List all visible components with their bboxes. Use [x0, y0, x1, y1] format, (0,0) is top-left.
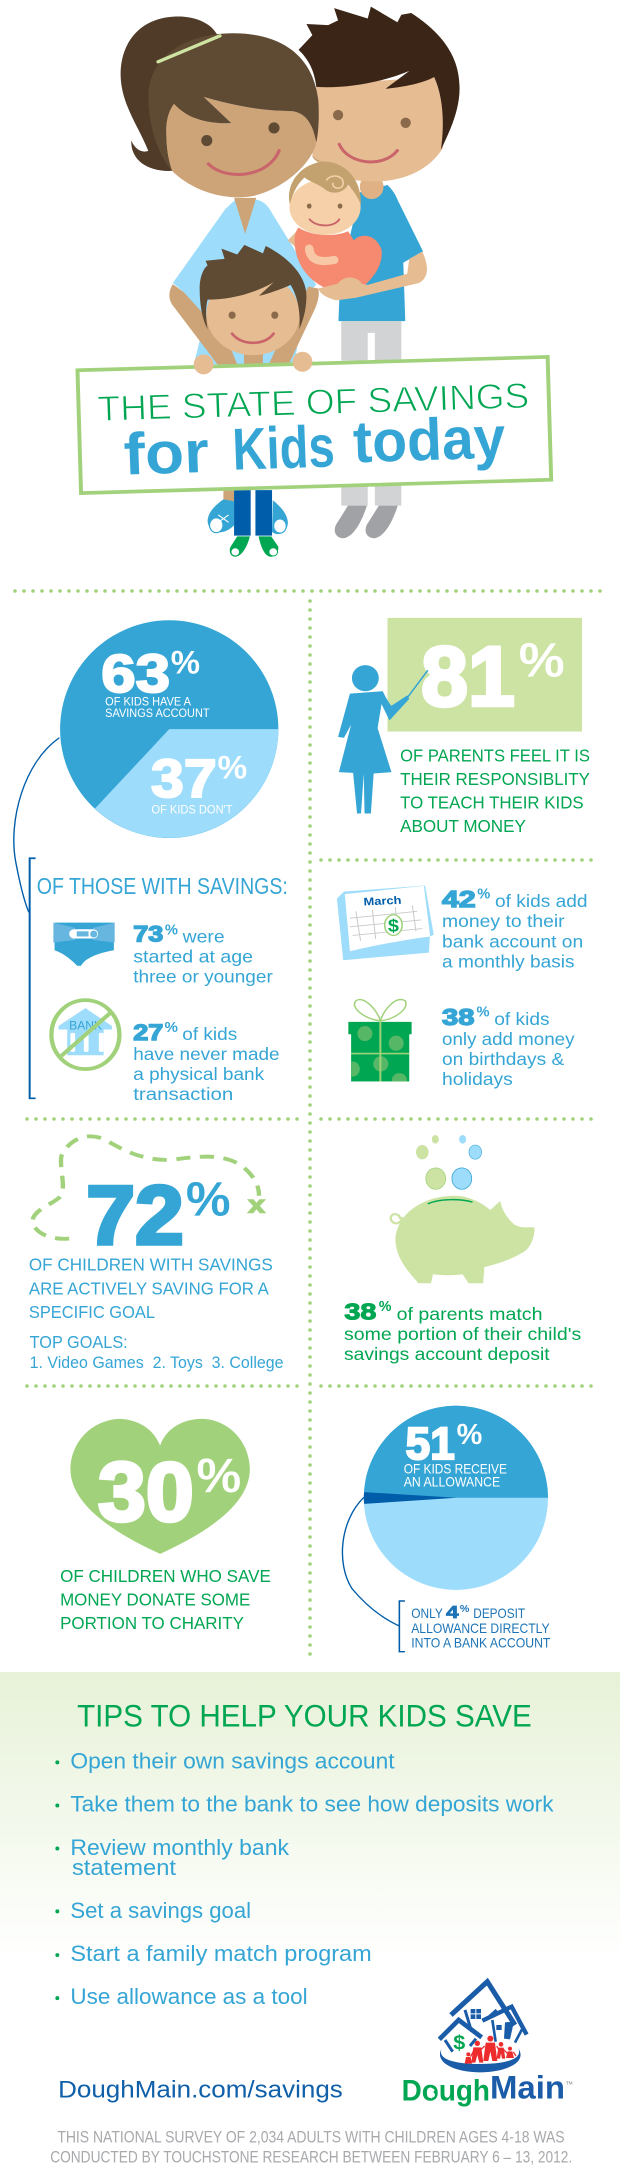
list: tips: Use allowance as a tool: [70, 1985, 308, 2009]
stat: 72 percent saving for goal: %: [186, 1172, 231, 1226]
icon: march calendar: March: [363, 894, 402, 908]
stat: 38 percent of parents match: [344, 1299, 581, 1364]
stat: 42 percent add monthly: a monthly basis: [442, 952, 575, 971]
list: tips: Review monthly bank: [70, 1836, 290, 1861]
list: tips: Start a family match program: [70, 1942, 372, 1966]
connector: allowance pie to callout: [342, 1497, 399, 1626]
icon: dashed treasure path: x: [248, 1192, 265, 1218]
list: tips: Open their own savings account: [70, 1749, 395, 1774]
stat: 73 percent started young: [133, 923, 273, 986]
logo: doughmain: $: [453, 2031, 466, 2054]
stat: 38 percent of parents match: savings account deposit: [344, 1344, 550, 1364]
callout: 4 percent deposit allowance: INTO A BANK ACCOUNT: [411, 1636, 551, 1651]
pie chart: 63 percent have savings: 37: [151, 750, 217, 809]
stat: 27 percent never made bank transaction: have never made: [133, 1044, 280, 1064]
stat: 42 percent add monthly: %: [477, 886, 490, 902]
icon: houses: [439, 1982, 527, 2052]
icon: teacher silhouette: [338, 665, 428, 814]
illustration: boy: [200, 245, 306, 557]
icon: gift box: [346, 1000, 412, 1087]
callout: 4 percent deposit allowance: ALLOWANCE DIRECTLY: [411, 1621, 550, 1637]
stat: 42 percent add monthly: bank account on: [442, 932, 583, 951]
callout: 4 percent deposit allowance: DEPOSIT: [473, 1607, 525, 1622]
stat: 27 percent never made bank transaction: a physical bank: [133, 1064, 265, 1084]
title sign: [77, 357, 551, 493]
heading: for kids today: today: [352, 404, 506, 475]
icon: march calendar: [337, 885, 434, 960]
callout: 4 percent deposit allowance: [399, 1601, 551, 1652]
stat: 38 percent birthdays and holidays: on birthdays &: [442, 1049, 565, 1069]
panel: tips background: [0, 1672, 620, 2171]
list: tips: statement: [72, 1856, 176, 1880]
stat: 72 percent saving for goal: 72: [86, 1168, 184, 1262]
stat: 73 percent started young: three or younger: [133, 966, 273, 986]
stat: 38 percent of parents match: some portion of their child's: [344, 1324, 581, 1344]
stat: 38 percent of parents match: of parents match: [397, 1304, 542, 1324]
stat: 73 percent started young: %: [165, 923, 178, 938]
heading: for kids today: for: [123, 419, 210, 487]
logo: doughmain: Dough: [402, 2075, 490, 2108]
bracket: of those with savings: [30, 858, 36, 1098]
callout: 4 percent deposit allowance: 4: [446, 1603, 459, 1622]
pie chart: 63 percent have savings: %: [217, 750, 247, 786]
logo: doughmain: Main: [490, 2069, 565, 2105]
panel: 81 percent of parents: 81: [421, 630, 515, 724]
icon: no bank: BANK: [69, 1018, 102, 1032]
stat: 42 percent add monthly: money to their: [442, 911, 565, 931]
icon: heart with 30 percent: %: [197, 1448, 241, 1503]
stat: 27 percent never made bank transaction: %: [164, 1020, 178, 1036]
stat: 38 percent birthdays and holidays: of kids: [494, 1009, 550, 1029]
stat: 38 percent of parents match: %: [379, 1299, 391, 1315]
list: tips: Take them to the bank to see how deposits work: [70, 1792, 554, 1817]
hero: family holding title sign: [77, 7, 551, 557]
pie chart: 51 percent receive allowance: %: [457, 1419, 482, 1451]
stat: 73 percent started young: were: [182, 927, 225, 946]
stat: 72 percent saving for goal: OF CHILDREN WITH SAVINGS: [29, 1255, 273, 1274]
stat: 72 percent saving for goal: SPECIFIC GOAL: [29, 1302, 155, 1322]
pie chart: 51 percent receive allowance: 51: [406, 1418, 455, 1469]
panel: goals, match, charity, allowance: [29, 1135, 581, 1652]
panel: 81 percent of parents: ABOUT MONEY: [400, 817, 526, 837]
pie chart: 63 percent have savings: %: [171, 645, 200, 681]
illustration: baby: [288, 155, 427, 300]
stat: 38 percent birthdays and holidays: %: [476, 1004, 490, 1020]
text: children donate to charity: [60, 1566, 271, 1633]
pie chart: 63 percent have savings: OF KIDS HAVE A: [105, 695, 191, 708]
panel: 81 percent of parents: %: [519, 633, 565, 687]
stat: 38 percent birthdays and holidays: only add money: [442, 1029, 575, 1049]
heading: for kids today: Kids: [231, 413, 336, 482]
callout: 4 percent deposit allowance: %: [460, 1604, 470, 1615]
list: top goals: TOP GOALS:: [30, 1333, 128, 1352]
stat: 27 percent never made bank transaction: [133, 1020, 280, 1104]
icon: hands gripping sign: [194, 352, 312, 374]
stat: 38 percent birthdays and holidays: holidays: [442, 1069, 513, 1089]
icon: no bank: [51, 1000, 119, 1069]
stat: 42 percent add monthly: [442, 886, 588, 971]
heading: of those with savings: OF THOSE WITH SAVINGS:: [37, 875, 288, 900]
heading: for kids today: [123, 404, 506, 487]
text: children donate to charity: PORTION TO CHARITY: [60, 1613, 244, 1633]
panel: 81 percent of parents: [338, 618, 590, 837]
icon: piggy bank: [391, 1196, 535, 1283]
panel: 81 percent of parents: TO TEACH THEIR KIDS: [400, 793, 584, 813]
pie chart: 63 percent have savings: [60, 620, 278, 838]
icon: heart with 30 percent: [70, 1419, 250, 1554]
icon: heart with 30 percent: 30: [98, 1445, 194, 1539]
text: children donate to charity: OF CHILDREN WHO SAVE: [60, 1566, 271, 1586]
footnote: survey source: [50, 2127, 572, 2166]
stat: 73 percent started young: 73: [133, 923, 163, 947]
logo: doughmain: TM: [566, 2080, 573, 2085]
panel: tips to help your kids save: [50, 1699, 572, 2166]
pie chart: 51 percent receive allowance: [364, 1406, 548, 1590]
heading: the state of savings: THE STATE OF SAVINGS: [97, 376, 530, 429]
list: top goals: 1. Video Games 2. Toys 3. College: [30, 1353, 284, 1372]
pie chart: 51 percent receive allowance: AN ALLOWANCE: [404, 1475, 500, 1491]
stat: 27 percent never made bank transaction: of kids: [182, 1024, 237, 1044]
connector: pie to savings bracket: [14, 738, 59, 912]
icon: red family: [465, 2036, 516, 2064]
stat: 73 percent started young: started at age: [133, 946, 253, 966]
stat: 38 percent birthdays and holidays: [442, 1004, 575, 1089]
icon: diaper: [53, 923, 115, 966]
stat: 27 percent never made bank transaction: 27: [133, 1021, 163, 1045]
illustration: mother: [121, 16, 319, 364]
list: tips: [55, 1749, 554, 2009]
text: children donate to charity: MONEY DONATE SOME: [60, 1590, 250, 1609]
stat: 72 percent saving for goal: [29, 1168, 273, 1322]
stat: 42 percent add monthly: of kids add: [495, 891, 588, 911]
icon: coins above piggy bank: [416, 1135, 482, 1189]
logo: doughmain: [402, 1982, 573, 2108]
pie chart: 63 percent have savings: SAVINGS ACCOUNT: [105, 706, 210, 720]
stat: 38 percent birthdays and holidays: 38: [442, 1005, 474, 1031]
panel: savings account pie and stats: [14, 618, 590, 1104]
pie chart: 63 percent have savings: OF KIDS DON'T: [151, 802, 232, 816]
pie chart: 63 percent have savings: 63: [101, 645, 170, 704]
stat: 38 percent of parents match: 38: [344, 1299, 377, 1325]
stat: 42 percent add monthly: 42: [442, 887, 476, 913]
illustration: father: [299, 7, 460, 538]
pie chart: 51 percent receive allowance: OF KIDS RECEIVE: [404, 1462, 507, 1477]
link: website: DoughMain.com/savings: [58, 2076, 343, 2103]
logo: doughmain: $: [428, 2086, 435, 2100]
stat: 72 percent saving for goal: ARE ACTIVELY SAVING FOR A: [29, 1278, 269, 1298]
list: tips: Set a savings goal: [70, 1899, 251, 1923]
icon: dashed treasure path: [32, 1136, 265, 1239]
stat: 27 percent never made bank transaction: transaction: [133, 1084, 233, 1104]
callout: 4 percent deposit allowance: ONLY: [411, 1607, 443, 1622]
icon: march calendar: $: [388, 915, 400, 935]
list: top goals: [30, 1333, 284, 1372]
